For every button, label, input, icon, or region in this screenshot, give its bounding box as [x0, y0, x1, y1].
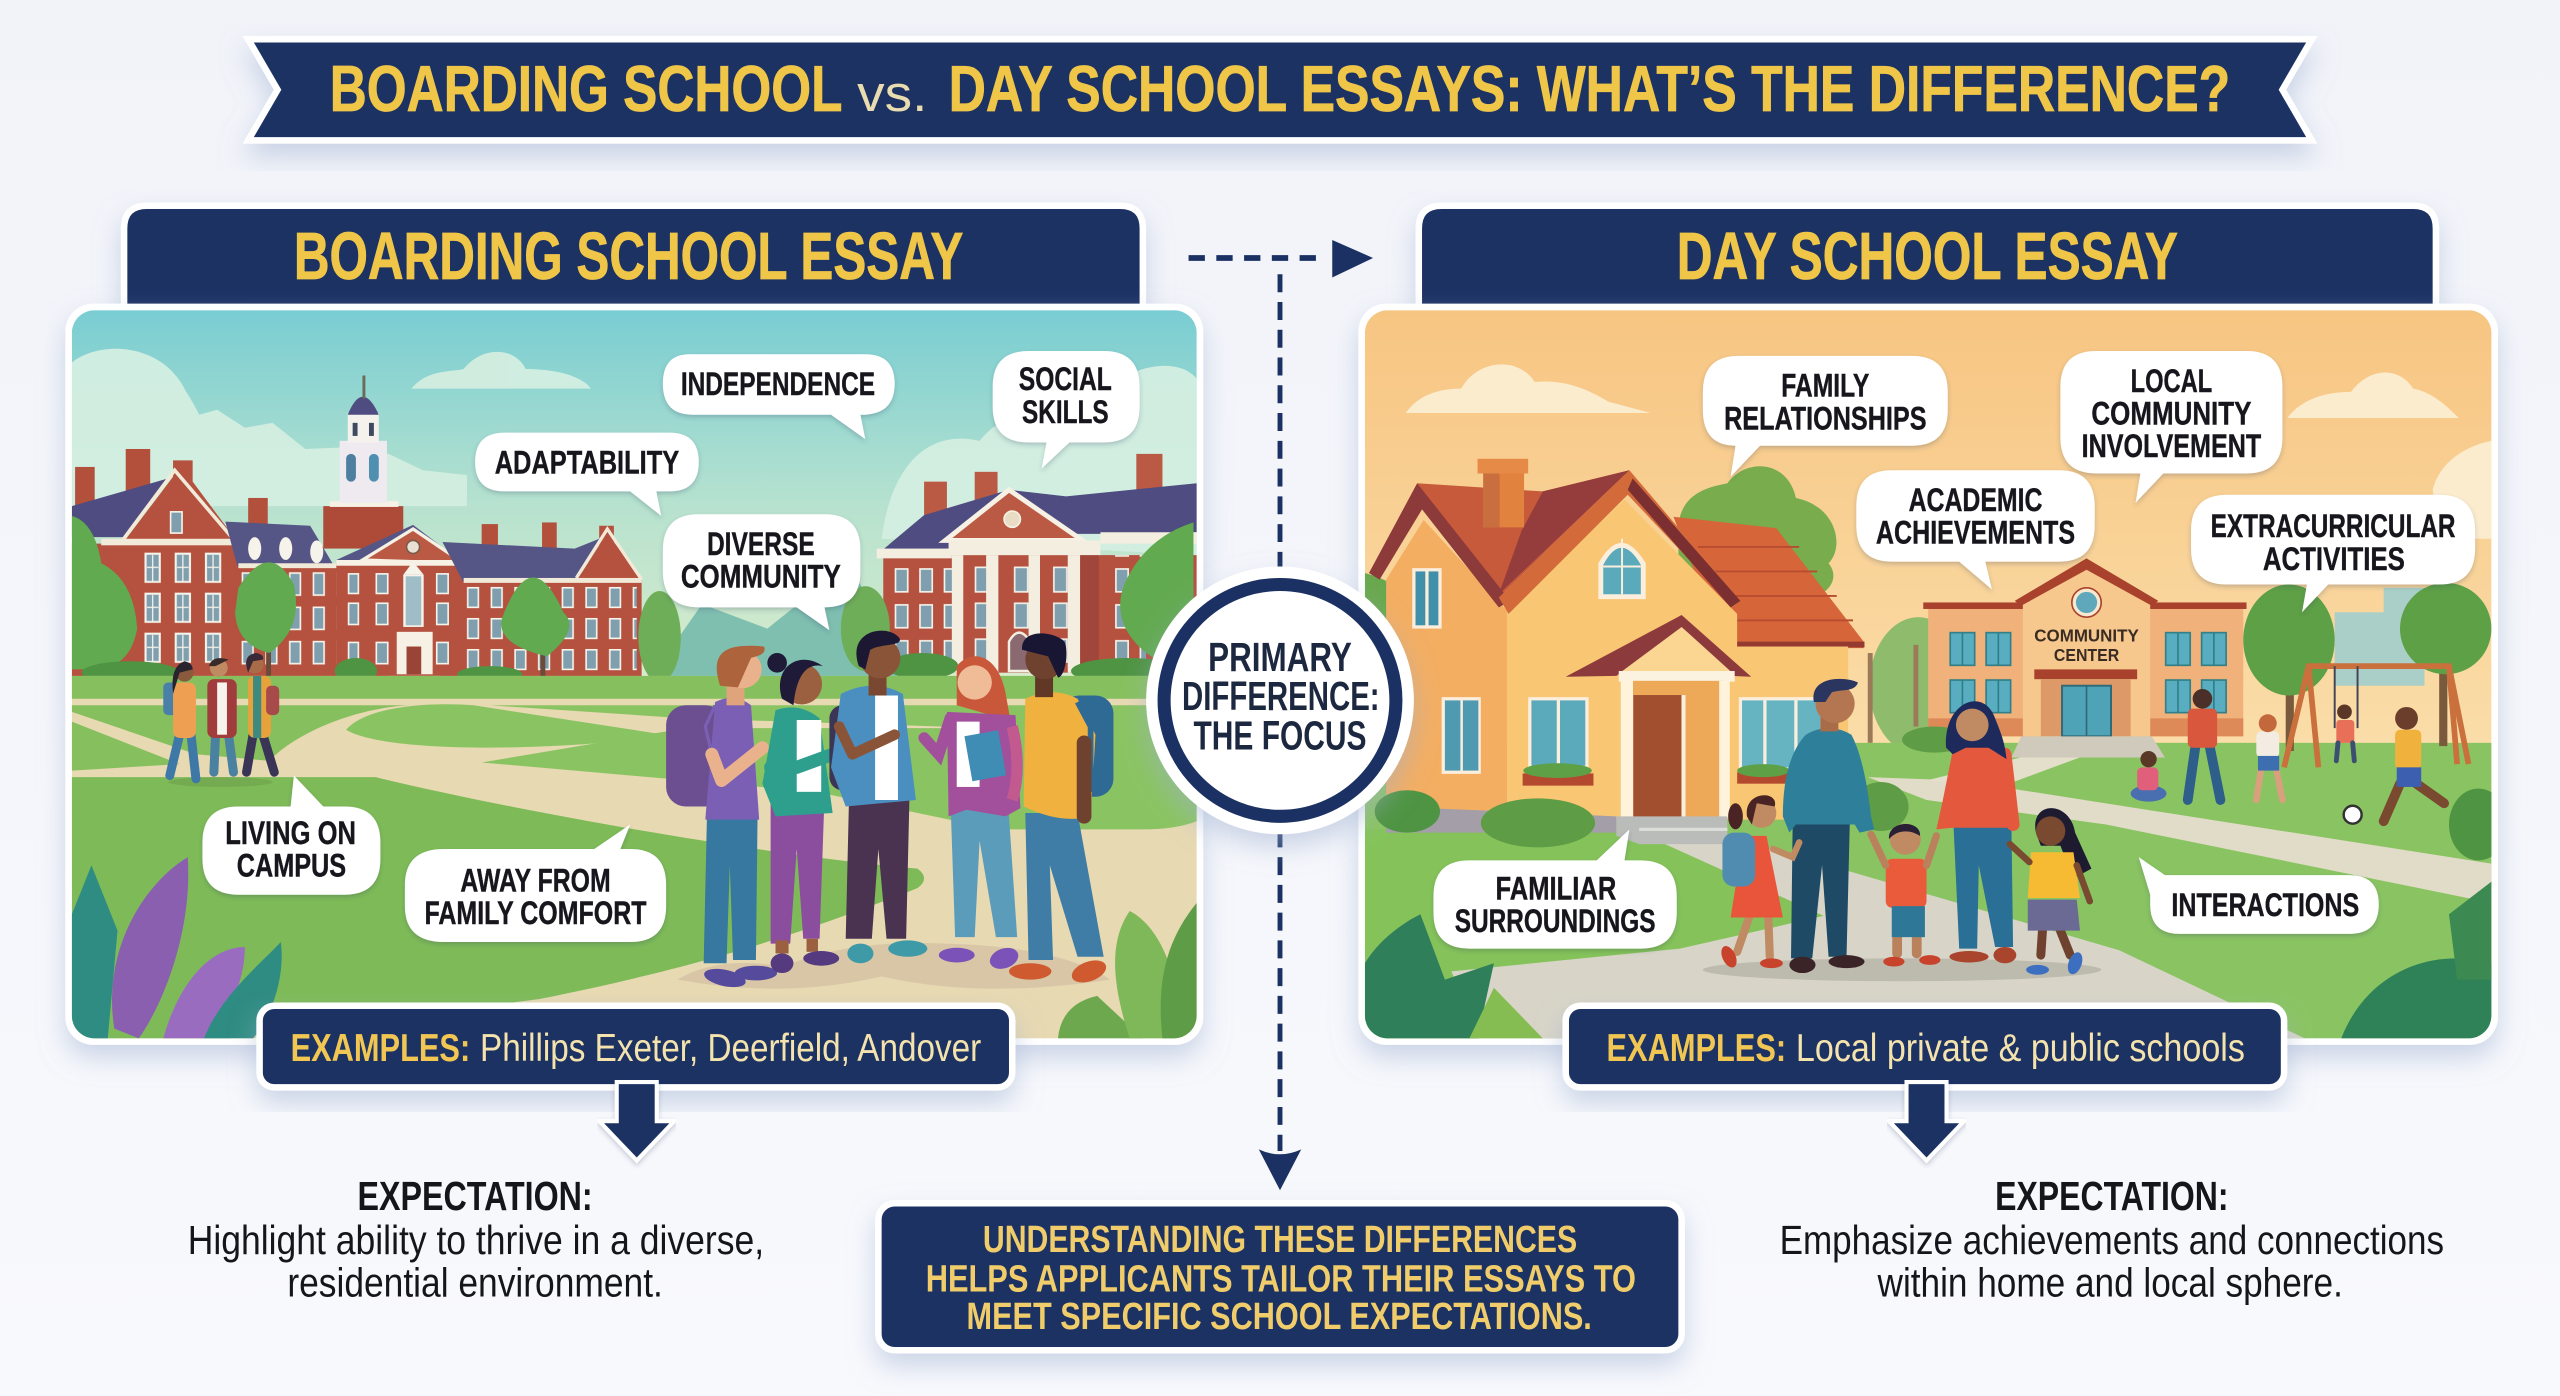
girl in yellow: [2010, 808, 2091, 976]
bubble: living on campus: [202, 776, 380, 895]
clock tower: [323, 376, 403, 549]
text: boarding expectation: EXPECTATION:: [358, 1173, 593, 1219]
grounds: [1365, 743, 2491, 1045]
bubble: extracurricular activities: ACTIVITIES: [2263, 540, 2405, 577]
community center: [1902, 558, 2247, 758]
bubble: living on campus: CAMPUS: [237, 847, 346, 884]
bubble: independence: INDEPENDENCE: [681, 365, 875, 402]
examples bar: day school: [1566, 1006, 2284, 1087]
centre badge: primary difference: THE FOCUS: [1193, 712, 1367, 758]
arrow: boarding examples to expectation: [604, 1084, 669, 1158]
bubble: familiar surroundings: [1433, 829, 1677, 949]
left hall: [72, 449, 240, 679]
distant skyline: [2335, 588, 2424, 686]
centre badge: primary difference: PRIMARY: [1208, 634, 1352, 680]
foreground foliage right: [1058, 903, 1197, 1038]
arrow: day examples to expectation: [1894, 1084, 1959, 1158]
bubble: independence: [663, 354, 895, 439]
header: boarding school essay: BOARDING SCHOOL ESSAY: [294, 219, 963, 294]
bubble: away from family comfort: [405, 824, 666, 942]
centre badge: primary difference: [1146, 567, 1414, 834]
swing set: [2284, 666, 2469, 767]
bubble: academic achievements: ACHIEVEMENTS: [1876, 514, 2075, 551]
mother: [1936, 701, 2016, 963]
bubble: away from family comfort: AWAY FROM: [460, 861, 611, 898]
examples bar: boarding: [260, 1006, 1012, 1087]
examples bar: day school: Local private & public schools: [1796, 1027, 2245, 1070]
summary box: UNDERSTANDING THESE DIFFERENCES: [983, 1218, 1577, 1260]
text: boarding expectation: residential environment.: [287, 1259, 663, 1305]
grounds with paths: [72, 676, 1197, 1038]
bubble: social skills: SKILLS: [1022, 393, 1109, 430]
text: day school expectation: EXPECTATION:: [1995, 1173, 2229, 1219]
group shadow on path: [678, 943, 1110, 989]
arrow: vertical dashed connector to summary: [1259, 274, 1301, 1190]
student 3: [829, 631, 927, 963]
playground trees: [2243, 583, 2508, 860]
bubble: away from family comfort: FAMILY COMFORT: [424, 894, 647, 931]
small student group: [163, 653, 279, 787]
student 5: [1009, 633, 1113, 987]
bubble: diverse community: DIVERSE: [707, 525, 815, 562]
bubble: social skills: SOCIAL: [1019, 360, 1112, 397]
summary box: HELPS APPLICANTS TAILOR THEIR ESSAYS TO: [926, 1257, 1636, 1299]
father: [1783, 679, 1874, 973]
bubble: interactions: INTERACTIONS: [2171, 886, 2359, 923]
student 2: [762, 653, 839, 973]
student 1: [666, 646, 777, 990]
student 4: [924, 656, 1021, 973]
examples bar: boarding: EXAMPLES:: [291, 1027, 470, 1070]
bubble: adaptability: ADAPTABILITY: [495, 443, 679, 480]
bubble: family relationships: [1703, 356, 1948, 477]
arrow: connector between headers: [1189, 240, 1373, 278]
bubble: diverse community: COMMUNITY: [681, 558, 841, 595]
title banner: [248, 39, 2312, 140]
bubble: familiar surroundings: FAMILIAR: [1496, 870, 1616, 907]
header: day school essay: DAY SCHOOL ESSAY: [1677, 219, 2178, 294]
centre badge: primary difference: DIFFERENCE:: [1182, 673, 1380, 719]
bubble: local community involvement: [2060, 351, 2282, 503]
background trees: [72, 516, 1193, 691]
text: boarding expectation: Highlight ability to thrive in a diverse,: [188, 1217, 764, 1263]
bubble: extracurricular activities: EXTRACURRICULAR: [2211, 507, 2456, 544]
family ground shadow: [1703, 958, 2101, 981]
right hall: [877, 454, 1197, 673]
community center sign: CENTER: [2054, 645, 2119, 665]
title banner: DAY SCHOOL ESSAYS: WHAT’S THE DIFFERENCE?: [949, 52, 2230, 125]
house: [1369, 459, 1909, 847]
text: boarding expectation: [188, 1173, 764, 1305]
title banner: BOARDING SCHOOL: [330, 52, 842, 125]
foreground bushes: [1365, 882, 2491, 1038]
examples bar: boarding: Phillips Exeter, Deerfield, Andover: [480, 1027, 981, 1070]
trees behind house: [1365, 466, 1928, 743]
right wing: [442, 522, 642, 679]
far hills: [670, 582, 898, 676]
summary box: [878, 1203, 1682, 1350]
bubble: living on campus: LIVING ON: [225, 814, 356, 851]
community center sign: COMMUNITY: [2034, 626, 2139, 646]
panel: day school scene: [1358, 304, 2508, 1045]
panel: boarding school scene: [65, 304, 1203, 1045]
bubble: family relationships: RELATIONSHIPS: [1724, 399, 1927, 436]
bubble: adaptability: [475, 433, 699, 516]
bubble: local community involvement: COMMUNITY: [2091, 394, 2252, 431]
bubble: local community involvement: LOCAL: [2131, 362, 2212, 399]
summary box: MEET SPECIFIC SCHOOL EXPECTATIONS.: [967, 1295, 1592, 1337]
bubble: familiar surroundings: SURROUNDINGS: [1455, 902, 1656, 939]
playing children: [2131, 689, 2444, 824]
bubble: diverse community: [663, 514, 860, 630]
text: day school expectation: [1780, 1173, 2444, 1305]
community center sign: [2034, 630, 2138, 661]
text: day school expectation: Emphasize achievements and connections: [1780, 1217, 2444, 1263]
central hall: [336, 524, 463, 676]
bubble: academic achievements: ACADEMIC: [1909, 481, 2042, 518]
text: day school expectation: within home and local sphere.: [1877, 1259, 2343, 1305]
boy: [1871, 824, 1940, 967]
header: boarding school essay: [124, 206, 1143, 318]
bubble: local community involvement: INVOLVEMENT: [2082, 427, 2261, 464]
girl with backpack: [1718, 795, 1799, 970]
middle wing: [225, 498, 340, 679]
foreground foliage left: [72, 857, 282, 1038]
bubble: social skills: [993, 351, 1140, 469]
title banner: vs.: [857, 65, 927, 122]
bubble: interactions: [2139, 857, 2379, 934]
examples bar: day school: EXAMPLES:: [1607, 1027, 1786, 1070]
bubble: extracurricular activities: [2191, 495, 2475, 612]
bubble: academic achievements: [1856, 470, 2095, 589]
header: day school essay: [1419, 206, 2436, 318]
bubble: family relationships: FAMILY: [1781, 367, 1870, 404]
